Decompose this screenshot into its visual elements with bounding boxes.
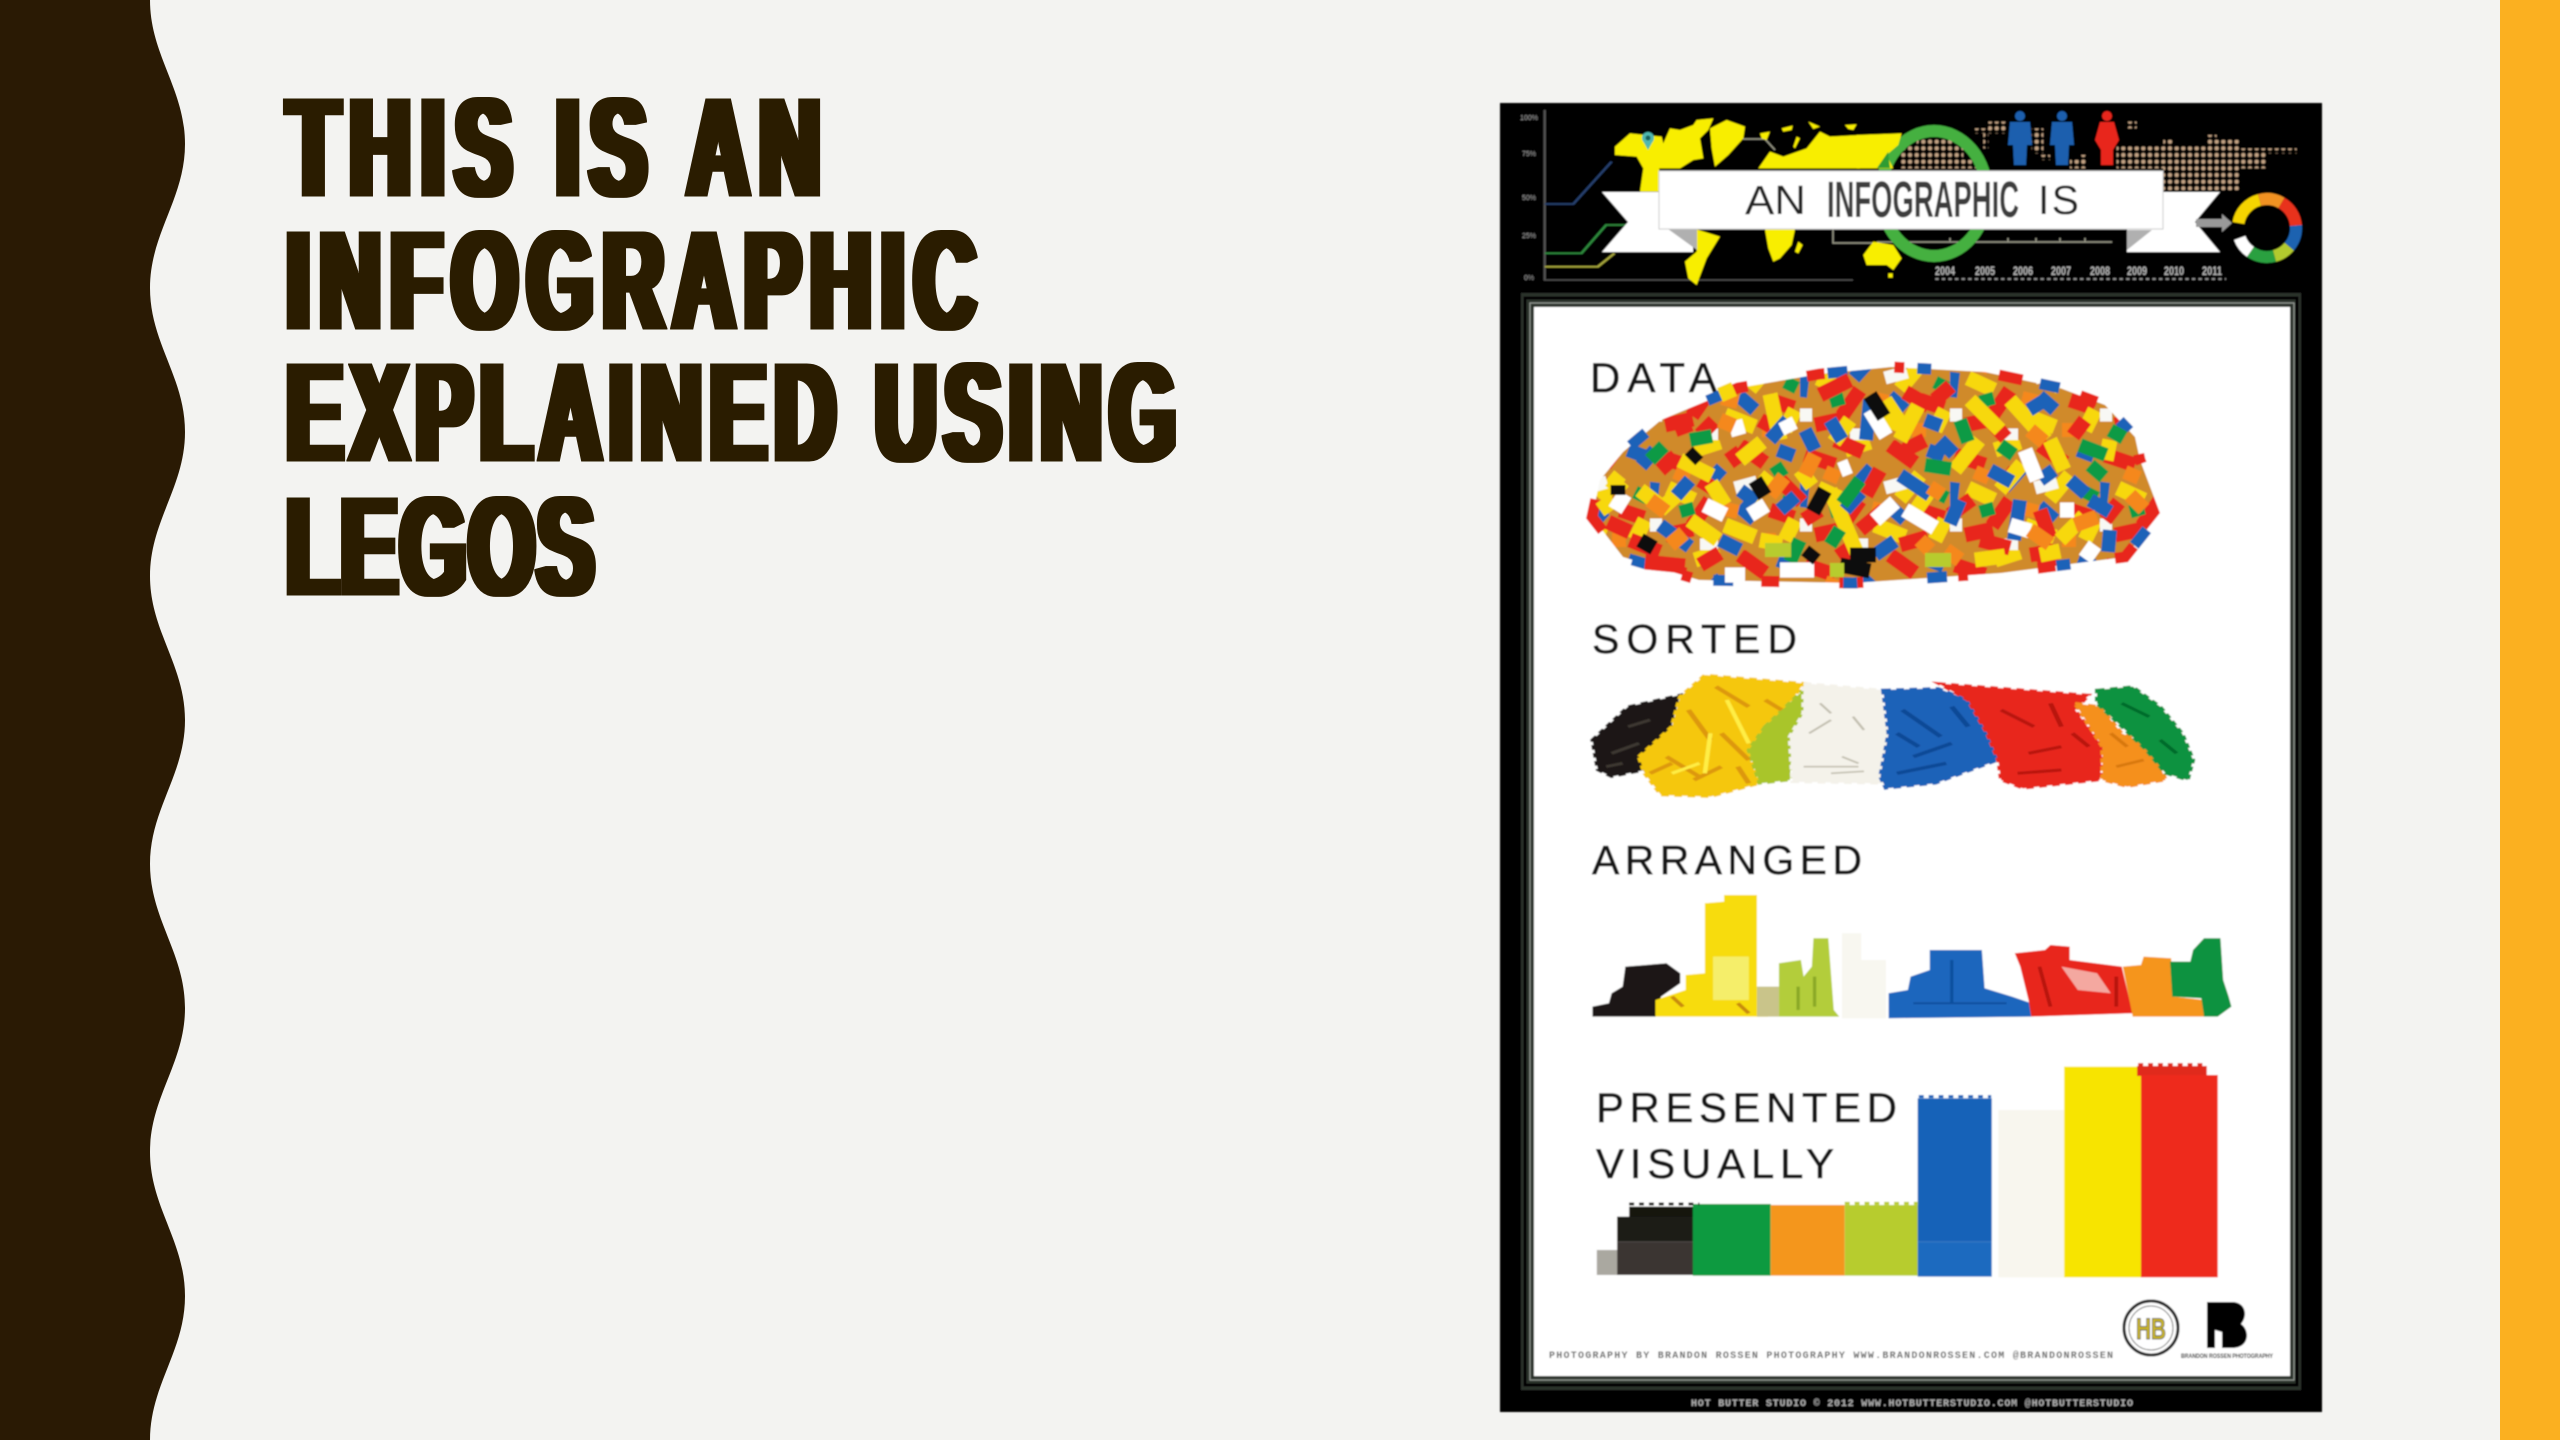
title: LEGOS (286, 468, 594, 625)
timeline years: 2007 (2051, 264, 2071, 278)
asia landmass over ring (1857, 133, 1902, 168)
chart axis labels: 100% (1520, 115, 1538, 122)
brandon rossen logo (2181, 1302, 2273, 1360)
label: presented visually: PRESENTED (1596, 1084, 1897, 1131)
hot butter logo: HB (2136, 1313, 2166, 1346)
red bar (2137, 1066, 2218, 1277)
sorted lego pile (1592, 675, 2193, 797)
timeline years: 2010 (2164, 264, 2184, 278)
label: sorted: SORTED (1592, 616, 1797, 662)
photography credit: PHOTOGRAPHY BY BRANDON ROSSEN PHOTOGRAPHY WWW.BRANDONROSSEN.COM @BRANDONROSSEN (1549, 1350, 2113, 1362)
banner centre (1659, 171, 2163, 229)
grey bar (1597, 1250, 1617, 1275)
arranged lego skyline (1592, 895, 2231, 1018)
dotted world map (1900, 122, 2297, 190)
chart axis labels: 0% (1524, 275, 1534, 282)
yellow bar (2064, 1067, 2141, 1277)
title (286, 69, 1176, 625)
green ring (1881, 131, 1987, 256)
timeline years: 2008 (2090, 264, 2110, 278)
label: presented visually (1596, 1084, 1897, 1187)
timeline years: 2011 (2202, 264, 2222, 278)
label: presented visually: VISUALLY (1596, 1140, 1834, 1187)
hot butter logo (2124, 1301, 2178, 1355)
connector lines (1743, 139, 2112, 243)
orange bar (1771, 1205, 1845, 1276)
right orange band (2500, 0, 2560, 1440)
panel: lego infographic poster (1500, 103, 2322, 1412)
banner ribbon tails (1602, 192, 2220, 252)
label: arranged: ARRANGED (1592, 837, 1862, 883)
timeline years: 2004 (1935, 264, 1955, 278)
yellow world map (1615, 118, 1902, 285)
title: INFOGRAPHIC (286, 202, 975, 359)
ring highlight (1877, 152, 1890, 168)
white bar (1998, 1110, 2064, 1277)
brandon rossen logo: BRANDON ROSSEN PHOTOGRAPHY (2181, 1354, 2273, 1360)
banner title: IS (2038, 177, 2079, 223)
lime bar (1845, 1205, 1918, 1276)
data lego pile (1592, 367, 2160, 583)
chart axis labels: 25% (1522, 233, 1536, 240)
green bar (1693, 1204, 1771, 1276)
brick studs (1629, 1065, 2207, 1204)
label: data: DATA (1590, 354, 1717, 401)
chart axis labels: 75% (1522, 151, 1536, 158)
blue bar (1918, 1098, 1992, 1277)
chart axis labels (1520, 115, 1538, 282)
people icons (2008, 111, 2119, 165)
poster black background (1500, 103, 2322, 1412)
studio credit: HOT BUTTER STUDIO © 2012 WWW.HOTBUTTERSTUDIO.COM @HOTBUTTERSTUDIO (1691, 1398, 2133, 1410)
banner title (1745, 171, 2079, 228)
white content panel (1534, 307, 2290, 1376)
left line chart (1545, 110, 2226, 280)
arrow (2196, 214, 2232, 232)
timeline years: 2005 (1975, 264, 1995, 278)
timeline years: 2009 (2127, 264, 2147, 278)
left wavy band (0, 0, 185, 1440)
timeline years: 2006 (2013, 264, 2033, 278)
lego bar chart (1597, 1065, 2218, 1277)
chart axis labels: 50% (1522, 195, 1536, 202)
banner title: INFOGRAPHIC (1827, 171, 2019, 228)
inner frame (1521, 293, 2301, 1390)
timeline years (1935, 264, 2222, 278)
title: EXPLAINED USING (286, 334, 1176, 491)
banner title: AN (1745, 177, 1806, 223)
colour ring (2238, 199, 2296, 257)
title: THIS IS AN (288, 69, 820, 226)
map pin (1642, 132, 1654, 150)
header graphic (1520, 110, 2297, 285)
black bar (1617, 1207, 1699, 1275)
